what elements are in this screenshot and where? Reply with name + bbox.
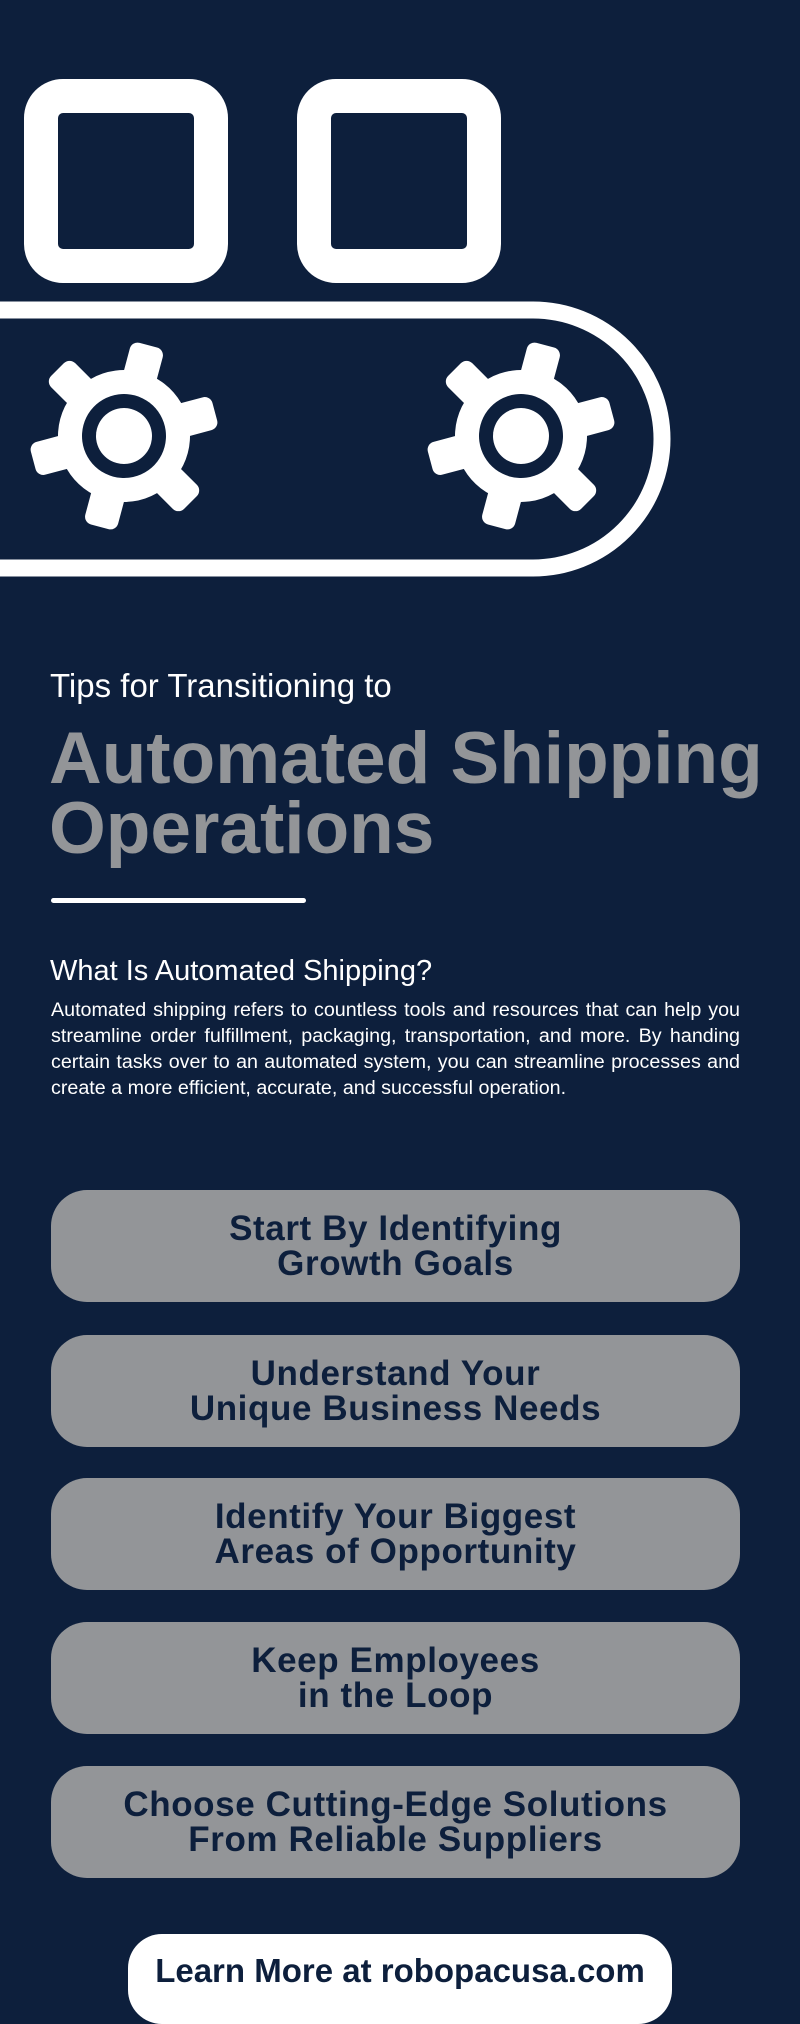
tip 4 bbox=[51, 1622, 740, 1734]
icon: box right bbox=[314, 96, 484, 266]
tip 1: Start By Identifying bbox=[229, 1209, 562, 1248]
tip 2 bbox=[51, 1335, 740, 1447]
icon: box left bbox=[41, 96, 211, 266]
tip 4: in the Loop bbox=[298, 1676, 493, 1715]
tip 2: Unique Business Needs bbox=[190, 1389, 601, 1428]
icon: gear left bbox=[13, 322, 235, 550]
hero illustration: conveyor with boxes and gears bbox=[0, 79, 670, 576]
icon: conveyor belt bbox=[0, 310, 662, 568]
tip 5 bbox=[51, 1766, 740, 1878]
divider line bbox=[51, 898, 306, 903]
icon: gear right bbox=[410, 322, 632, 550]
title: Operations bbox=[49, 788, 434, 869]
tip 5: Choose Cutting-Edge Solutions bbox=[123, 1785, 668, 1824]
section heading: What Is Automated Shipping? bbox=[50, 955, 432, 987]
tip 4: Keep Employees bbox=[251, 1641, 540, 1680]
tip 3: Identify Your Biggest bbox=[215, 1497, 576, 1536]
subtitle: Tips for Transitioning to bbox=[50, 667, 392, 704]
title bbox=[49, 718, 763, 869]
tip 3 bbox=[51, 1478, 740, 1590]
tip 5: From Reliable Suppliers bbox=[188, 1820, 603, 1859]
footer call to action: Learn More at robopacusa.com bbox=[155, 1952, 645, 1989]
tip 1 bbox=[51, 1190, 740, 1302]
footer call to action bbox=[128, 1934, 672, 2024]
tip 2: Understand Your bbox=[251, 1354, 540, 1393]
tip 3: Areas of Opportunity bbox=[214, 1532, 577, 1571]
tip 1: Growth Goals bbox=[277, 1244, 514, 1283]
paragraph: Automated shipping refers to countless tools and resources that can help you streamline order fulfillment, packaging, transportation, and more. By handing certain tasks over to an automated system, you can streamline processes and create a more efficient, accurate, and successful operation. bbox=[51, 999, 740, 1099]
title: Automated Shipping bbox=[49, 718, 763, 799]
